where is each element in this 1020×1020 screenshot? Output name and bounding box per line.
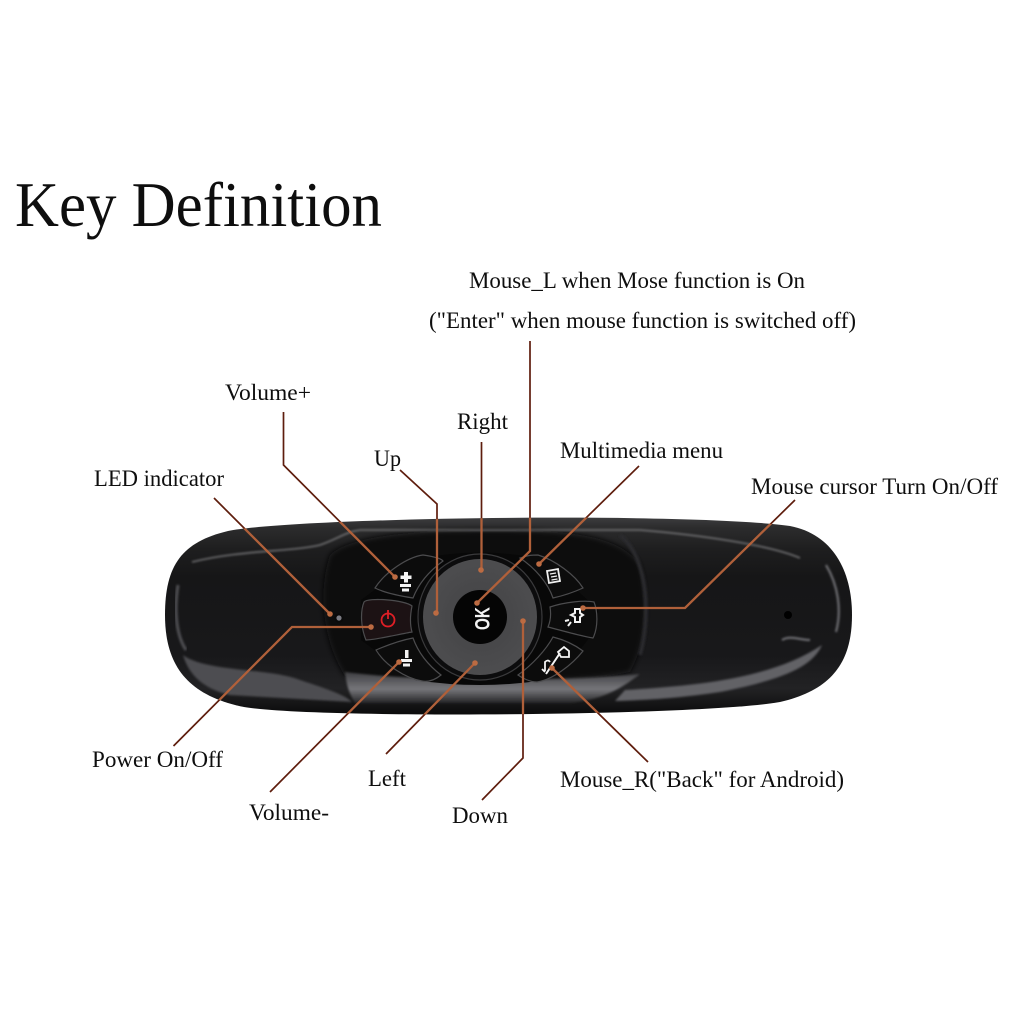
title: Key Definition <box>15 169 382 240</box>
button: mouse right back <box>518 637 583 682</box>
lower reflection left <box>183 655 352 702</box>
label: right: Right <box>457 409 509 434</box>
button: power <box>362 599 412 640</box>
microphone hole <box>784 611 792 619</box>
upper rim highlight <box>192 530 800 562</box>
ok label: OK <box>472 607 494 630</box>
leader end dots <box>327 561 586 671</box>
button: volume down <box>376 638 441 681</box>
button: mouse cursor <box>548 601 597 638</box>
icon: volume plus <box>400 572 412 592</box>
label: mouse left: Mouse_L when Mose function is On <box>469 268 805 293</box>
button: multimedia menu <box>520 555 583 598</box>
icon: mouse <box>565 609 583 626</box>
lower reflection centre <box>345 672 640 703</box>
directional pad <box>423 559 537 675</box>
label: power: Power On/Off <box>92 747 223 772</box>
remote control body <box>165 518 852 714</box>
button: volume up <box>375 555 443 598</box>
label: volume minus: Volume- <box>249 800 329 825</box>
label: enter: ("Enter" when mouse function is switched off) <box>429 308 856 333</box>
scroll wheel ring <box>418 554 542 680</box>
label: multimedia menu: Multimedia menu <box>560 438 723 463</box>
ok button <box>453 590 507 644</box>
label: up: Up <box>374 446 401 471</box>
icon: back and home <box>542 647 569 674</box>
right arc of central recess <box>620 535 646 655</box>
button cluster backing <box>361 552 598 685</box>
label: led indicator: LED indicator <box>94 466 224 491</box>
icon: power symbol <box>382 610 394 626</box>
left end highlight <box>176 585 186 650</box>
remote shell <box>165 518 852 714</box>
label: volume plus: Volume+ <box>225 380 311 405</box>
leader lines <box>174 341 795 800</box>
central dark recess <box>323 530 645 682</box>
right end highlight <box>782 565 839 640</box>
lower reflection right <box>615 645 822 701</box>
label: mouse cursor: Mouse cursor Turn On/Off <box>751 474 998 499</box>
label: mouse right: Mouse_R("Back" for Android) <box>560 767 844 792</box>
label: down: Down <box>452 803 508 828</box>
LED indicator <box>335 614 343 622</box>
icon: volume minus <box>401 650 412 666</box>
icon: menu <box>547 569 560 583</box>
label: left: Left <box>368 766 407 791</box>
